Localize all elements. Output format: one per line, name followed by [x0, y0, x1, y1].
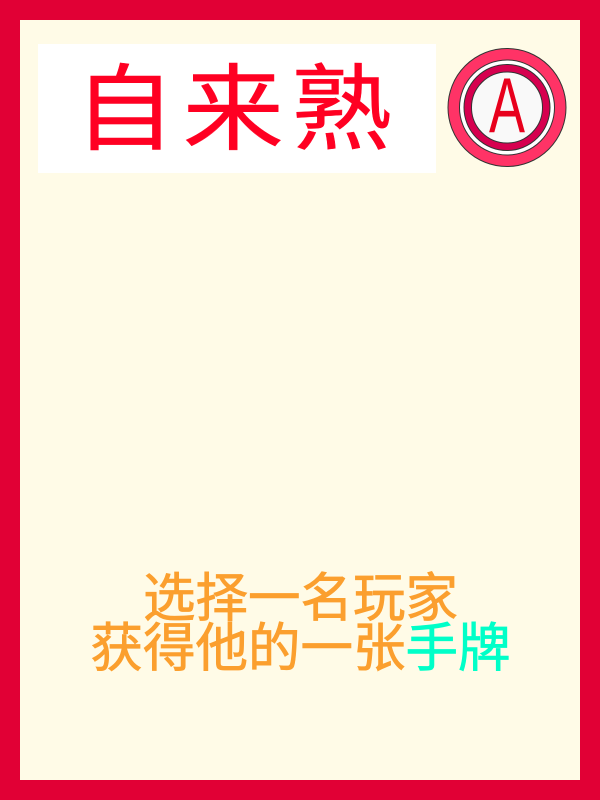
description text: 选择一名玩家	[143, 556, 458, 632]
description text: 获得他的一张手牌	[90, 606, 511, 682]
icon: suit badge A	[448, 48, 566, 167]
icon: suit badge A: A	[489, 61, 525, 149]
description text	[90, 556, 511, 682]
title: 自来熟	[74, 34, 400, 170]
